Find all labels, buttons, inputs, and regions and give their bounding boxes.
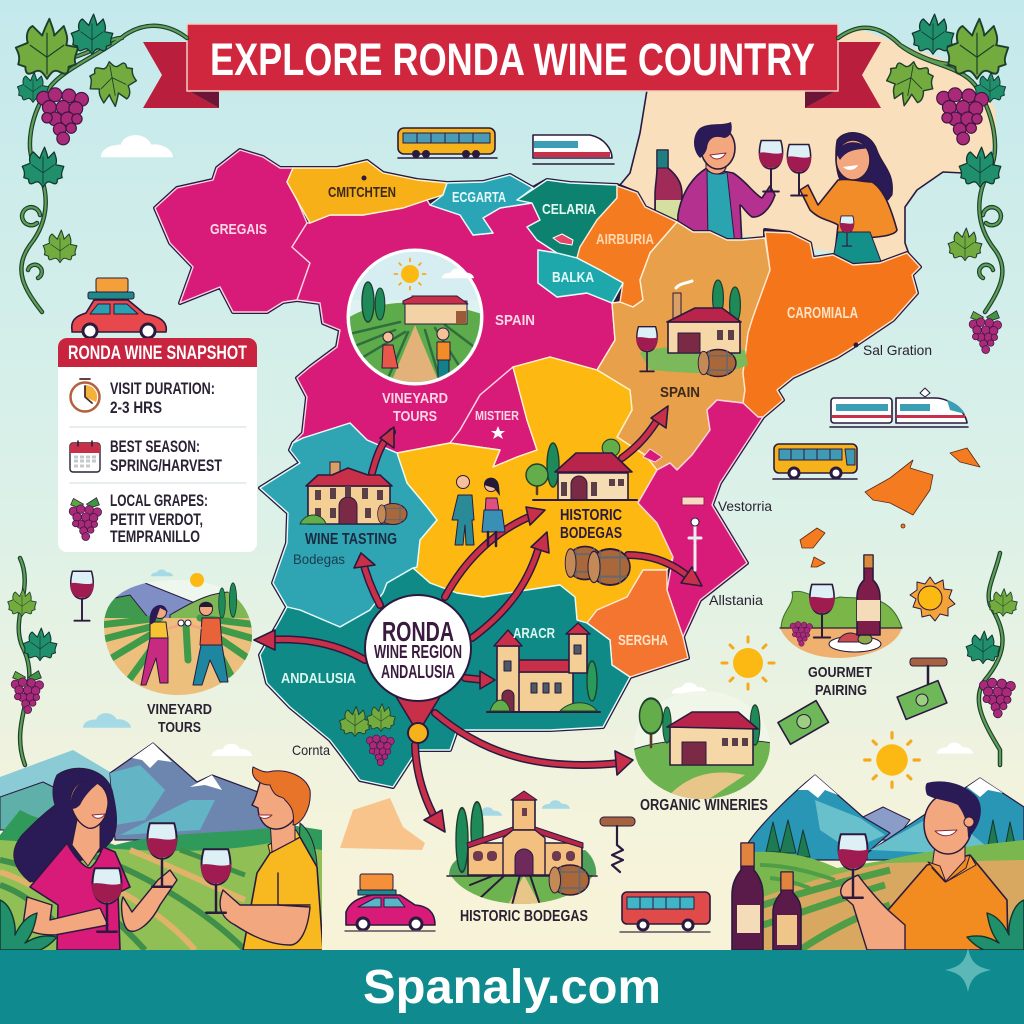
icon: sparkle <box>945 948 991 992</box>
region: central yellow <box>397 357 673 623</box>
icon: top bus <box>398 128 497 158</box>
sun <box>865 733 919 787</box>
icon: stopwatch <box>70 379 100 412</box>
stem <box>21 26 187 312</box>
small grapes <box>969 311 1002 354</box>
icon: grapes <box>69 498 102 541</box>
bottle <box>655 150 682 225</box>
neighbouring land: France <box>620 30 997 267</box>
glass small <box>840 216 854 246</box>
glass <box>759 141 783 191</box>
map labels: ANDALUSIA <box>281 670 356 687</box>
region: Andalusia <box>260 568 630 787</box>
map labels: BODEGAS <box>560 525 622 542</box>
region: Balka <box>538 250 623 303</box>
woman <box>14 768 116 882</box>
label: GOURMET <box>808 664 872 681</box>
ribbon folds <box>187 90 838 108</box>
grapes <box>937 88 988 145</box>
card <box>58 338 257 552</box>
ribbon tails <box>143 42 219 108</box>
map labels: Vestorria <box>718 498 772 514</box>
icon: money and corkscrew <box>778 658 947 744</box>
region: Celaria <box>517 180 617 258</box>
region: Gregais <box>155 150 310 312</box>
hikers <box>141 602 228 685</box>
people: couple toasting top right <box>655 122 897 264</box>
map labels: GREGAIS <box>210 221 267 238</box>
bottle <box>857 555 880 635</box>
region: east magenta <box>638 400 763 637</box>
wine bottles <box>732 843 801 950</box>
map labels: MISTIER <box>475 408 520 423</box>
leaves <box>16 14 140 263</box>
grapes <box>37 88 88 145</box>
stem <box>838 28 1002 312</box>
icon: top train <box>533 135 614 164</box>
icon: grapes on Andalusia <box>339 704 395 766</box>
glass <box>838 834 868 898</box>
map labels: Sal Gration <box>863 342 932 358</box>
panel: Ronda wine snapshot <box>58 338 257 552</box>
man <box>677 122 775 245</box>
map labels: Allstania <box>709 592 763 608</box>
sun <box>722 637 774 689</box>
label <box>808 664 872 699</box>
map labels: CMITCHTEN <box>328 184 396 201</box>
Aracr church <box>487 623 600 712</box>
icon: car with luggage <box>72 278 166 338</box>
historic bodega building <box>526 439 637 500</box>
map labels: VINEYARD <box>382 390 448 407</box>
cloud <box>151 569 173 576</box>
tan region bodega <box>636 280 748 376</box>
small map marks <box>362 176 858 505</box>
glasses <box>92 823 231 932</box>
text: visit duration: 2-3 HRS <box>110 398 162 417</box>
pin text: RONDA <box>382 616 454 647</box>
label: TOURS <box>158 719 201 736</box>
region: Caronimala <box>743 232 920 417</box>
icon: train right <box>830 388 968 427</box>
right vine <box>966 553 1017 765</box>
label: VINEYARD <box>147 701 212 718</box>
vineyard tours scene left <box>70 569 260 736</box>
pin text: WINE REGION <box>374 642 462 662</box>
mountains <box>860 807 910 840</box>
region: Mistier <box>450 367 537 467</box>
icon: corkscrew <box>689 518 701 570</box>
corner leaf <box>967 900 1024 950</box>
top right vine <box>838 14 1008 354</box>
map labels: ECGARTA <box>452 189 506 206</box>
gourmet pairing <box>780 555 955 699</box>
leaves <box>883 14 1008 261</box>
icon: spiky sun <box>910 577 955 621</box>
label: HISTORIC BODEGAS <box>460 908 588 925</box>
text: best season <box>110 437 222 475</box>
map labels: BALKA <box>552 269 594 286</box>
map labels: HISTORIC <box>560 507 622 524</box>
bottom left landscape <box>0 743 323 950</box>
text: best season: BEST SEASON: <box>110 437 200 456</box>
right side transport <box>773 388 968 479</box>
map labels <box>210 184 932 758</box>
ribbon tail right <box>805 42 881 108</box>
map of Spain regions <box>155 150 920 787</box>
map labels: AIRBURIA <box>596 231 654 248</box>
text: visit duration <box>110 379 215 417</box>
wine tasting building <box>300 462 407 524</box>
map coast outline <box>155 150 920 787</box>
map labels: SPAIN <box>660 384 700 401</box>
icon: bus right <box>773 444 857 479</box>
Ronda location pin <box>365 595 471 743</box>
text: local grapes: TEMPRANILLO <box>110 527 200 546</box>
bottom right landscape <box>732 775 1024 950</box>
glass <box>787 145 811 195</box>
top left vine <box>16 14 187 312</box>
text: visit duration: VISIT DURATION: <box>110 379 215 398</box>
footer <box>0 948 1024 1024</box>
fields <box>0 810 322 851</box>
map labels: Cornta <box>292 742 330 758</box>
clouds in sky <box>83 135 973 770</box>
footer text: Spanaly.com <box>363 961 661 1014</box>
icon: calendar <box>70 441 100 472</box>
pin text: ANDALUSIA <box>381 662 455 682</box>
map labels: SERGHA <box>618 632 668 649</box>
island: beige <box>340 798 425 850</box>
organic wineries scene <box>634 691 770 810</box>
text: local grapes <box>110 491 208 546</box>
historic bodegas bottom scene <box>446 791 635 925</box>
text: local grapes: PETIT VERDOT, <box>110 510 203 529</box>
islands <box>800 448 980 567</box>
map labels: Bodegas <box>293 551 345 567</box>
icon: pink car <box>345 874 435 931</box>
couple on yellow region <box>452 476 505 546</box>
region: Sergha <box>587 570 688 677</box>
region: Airburia <box>577 186 677 307</box>
ribbon <box>187 24 838 91</box>
man <box>888 855 1008 950</box>
icon: red bus <box>620 892 710 932</box>
barrels <box>565 546 630 585</box>
vineyard tours medallion <box>345 250 485 385</box>
map labels: WINE TASTING <box>305 531 397 548</box>
map labels: CELARIA <box>542 201 596 218</box>
region: wine tasting west <box>260 423 437 627</box>
map labels: TOURS <box>393 408 437 425</box>
panel heading: RONDA WINE SNAPSHOT <box>68 343 247 364</box>
woman <box>800 133 897 264</box>
icon: corkscrew <box>600 817 635 872</box>
title banner <box>143 24 881 108</box>
label: ORGANIC WINERIES <box>640 797 768 814</box>
map labels: SPAIN <box>495 312 535 329</box>
header <box>58 338 257 367</box>
region: central Spain <box>292 200 615 453</box>
pin text <box>374 616 462 682</box>
label: PAIRING <box>815 682 867 699</box>
man <box>299 822 318 866</box>
fields <box>754 840 1024 897</box>
region: tan Spain <box>597 222 770 470</box>
scene <box>104 580 252 695</box>
corner leaf <box>0 900 57 950</box>
mountains <box>0 750 110 796</box>
label <box>147 701 212 736</box>
map labels: CAROMIALA <box>787 305 858 322</box>
text: best season: SPRING/HARVEST <box>110 456 222 475</box>
routes: arrows <box>254 406 702 832</box>
region: Ecgarta <box>430 175 533 235</box>
heading: EXPLORE RONDA WINE COUNTRY <box>210 34 815 85</box>
text: local grapes: LOCAL GRAPES: <box>110 491 208 510</box>
glass <box>70 571 94 621</box>
map labels: ARACR <box>513 625 555 642</box>
left vine <box>8 558 57 765</box>
region: Cmitchten <box>287 161 447 223</box>
